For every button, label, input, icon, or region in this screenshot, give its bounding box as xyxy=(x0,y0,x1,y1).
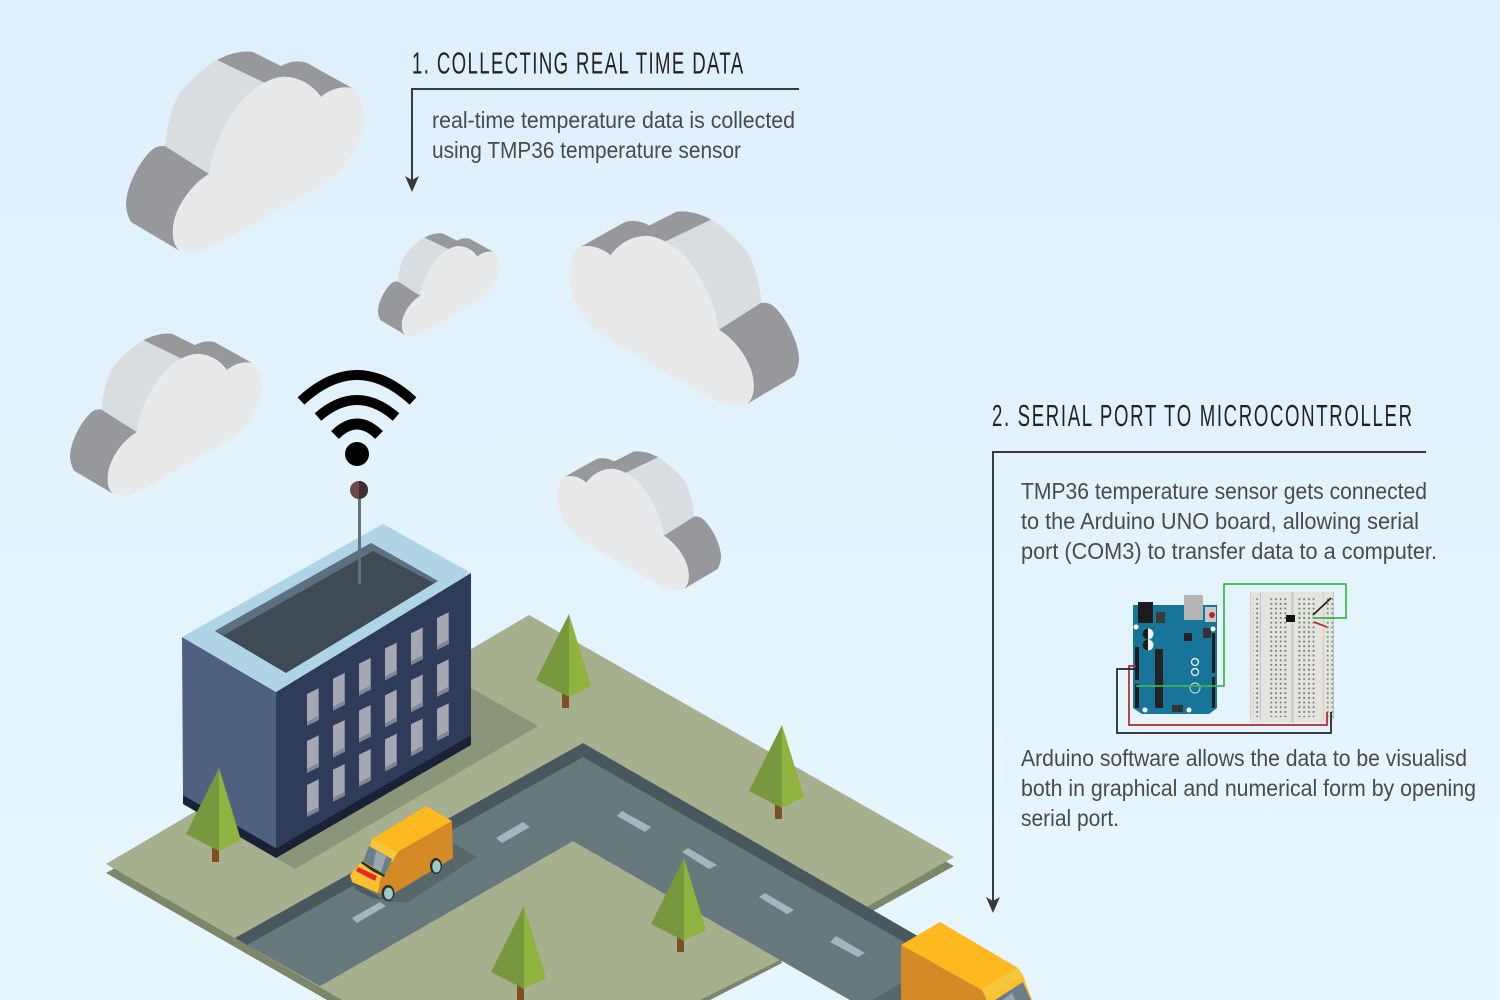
cloud: medium right xyxy=(557,451,721,590)
tree: front right xyxy=(651,858,706,952)
Arduino board xyxy=(1133,595,1217,714)
tree: by building xyxy=(186,768,241,862)
step 1 text: using TMP36 temperature sensor xyxy=(432,137,741,163)
step 2 text top: to the Arduino UNO board, allowing serial xyxy=(1021,508,1419,534)
step 2 text top: port (COM3) to transfer data to a computer. xyxy=(1021,538,1437,564)
Arduino and breadboard circuit diagram xyxy=(1117,584,1346,733)
step 2 text bottom: serial port. xyxy=(1021,805,1119,831)
breadboard xyxy=(1250,592,1334,723)
step 2 text top: TMP36 temperature sensor gets connected xyxy=(1021,478,1427,504)
cloud: large top left xyxy=(126,51,364,253)
cloud: medium left xyxy=(70,333,262,496)
large delivery van cropped at bottom xyxy=(872,922,1032,1000)
step 2 text top xyxy=(1021,478,1437,564)
building with antenna xyxy=(182,481,538,869)
step 1 heading: 1. COLLECTING REAL TIME DATA xyxy=(412,47,743,81)
cloud: large right xyxy=(569,211,799,406)
tree: right xyxy=(749,725,804,819)
step 2 text bottom: Arduino software allows the data to be visualisd xyxy=(1021,745,1467,771)
cloud: small centre xyxy=(378,233,499,336)
step 2 heading: 2. SERIAL PORT TO MICROCONTROLLER xyxy=(992,399,1412,433)
tree: back xyxy=(536,614,591,708)
step 1 text: real-time temperature data is collected xyxy=(432,107,795,133)
step 1 text xyxy=(432,107,795,163)
step 2 text bottom xyxy=(1021,745,1476,831)
jumper wires xyxy=(1117,584,1346,733)
ground and road xyxy=(106,615,954,1000)
step 2 text bottom: both in graphical and numerical form by opening xyxy=(1021,775,1476,801)
icon: wifi signal xyxy=(301,375,413,466)
step 1 arrow xyxy=(405,89,799,192)
small delivery van xyxy=(350,806,477,902)
tree: front xyxy=(491,906,546,1000)
step 2 arrow xyxy=(986,452,1426,913)
